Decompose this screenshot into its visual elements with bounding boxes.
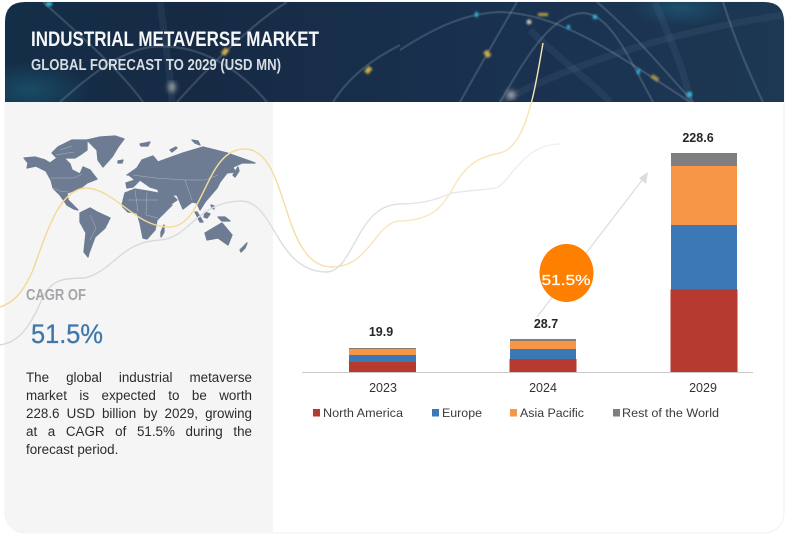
- legend: Asia Pacific: [520, 406, 584, 420]
- description paragraph: forecast period.: [26, 442, 118, 457]
- baseline axis: [302, 372, 753, 374]
- description paragraph: The global industrial metaverse: [26, 370, 252, 385]
- description paragraph: [26, 370, 252, 457]
- growth curve: gray: [0, 144, 560, 345]
- bar: 2029: [670, 153, 738, 372]
- arrow: growth: [537, 172, 648, 317]
- value label 2024: 28.7: [534, 317, 558, 331]
- label: CAGR of: CAGR OF: [26, 287, 86, 304]
- axis labels: 2029: [689, 381, 717, 395]
- bar: 2024: [510, 339, 576, 372]
- axis labels: 2024: [529, 381, 557, 395]
- bar: 2023: [349, 348, 416, 372]
- axis labels: [369, 381, 717, 395]
- panel: left summary background: [5, 102, 273, 532]
- subtitle: GLOBAL FORECAST TO 2029 (USD MN): [31, 57, 281, 74]
- callout: growth bubble: 51.5%: [542, 272, 590, 289]
- header banner: [5, 2, 784, 102]
- legend: [313, 406, 719, 420]
- title: INDUSTRIAL METAVERSE MARKET: [31, 27, 319, 51]
- callout: growth bubble: [540, 244, 594, 302]
- axis labels: 2023: [369, 381, 397, 395]
- value: CAGR 51.5%: 51.5%: [31, 319, 103, 349]
- description paragraph: at a CAGR of 51.5% during the: [26, 424, 252, 439]
- growth curve: yellow: [0, 43, 543, 307]
- legend: Rest of the World: [622, 406, 719, 420]
- legend: Europe: [442, 406, 482, 420]
- value label 2029: 228.6: [682, 131, 714, 145]
- description paragraph: market is expected to be worth: [26, 388, 252, 403]
- value label 2023: 19.9: [369, 325, 393, 339]
- legend: North America: [323, 406, 403, 420]
- world map: [24, 136, 255, 257]
- description paragraph: 228.6 USD billion by 2029, growing: [26, 406, 252, 421]
